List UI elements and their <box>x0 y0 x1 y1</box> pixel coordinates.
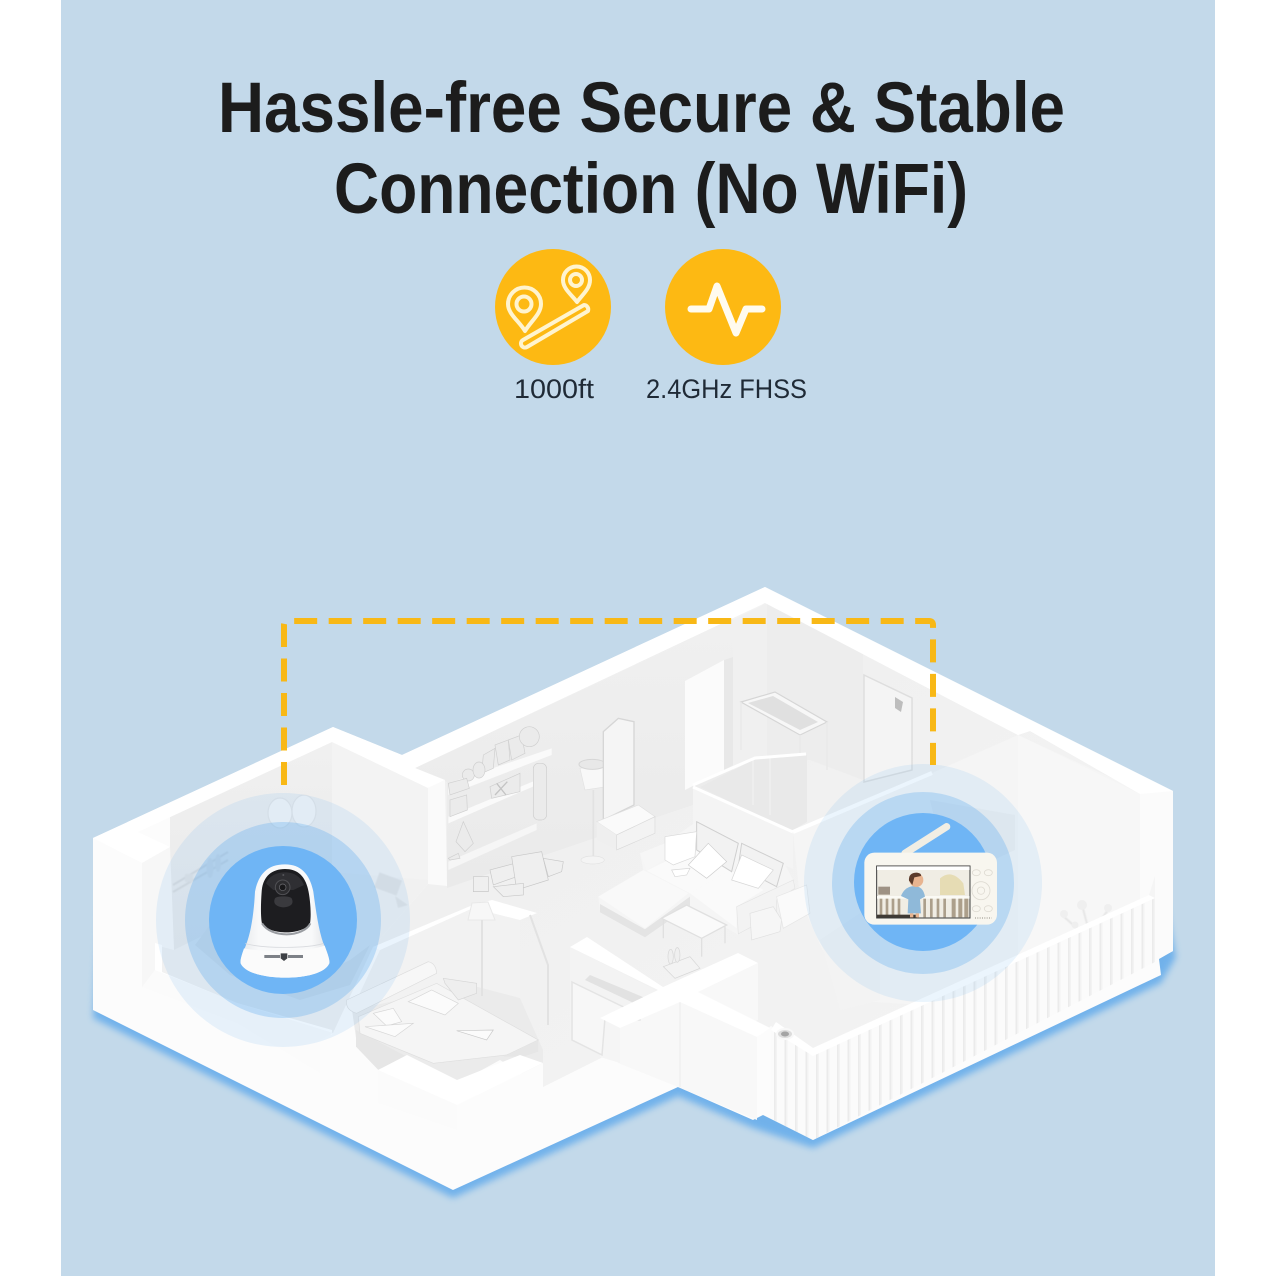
label: 2.4GHz FHSS: 2.4GHz FHSS <box>646 374 807 404</box>
wall faces <box>570 947 655 1053</box>
monitor control buttons <box>972 870 992 912</box>
camera lens face <box>261 869 311 932</box>
sofa <box>598 822 795 937</box>
feature: 1000ft range <box>495 249 611 404</box>
furniture: living room shelves, lamp, mirror, sofa <box>448 718 810 978</box>
wall tops <box>93 587 1173 863</box>
wall end pillar <box>428 780 447 886</box>
shower door <box>864 675 912 782</box>
sofa in left room <box>195 925 370 1000</box>
bookshelves <box>448 727 552 870</box>
right room bed and furniture <box>930 800 1015 880</box>
wall clocks <box>268 795 316 828</box>
floor vase cluster <box>663 948 700 978</box>
monitor antenna <box>905 827 947 853</box>
icon: map pins and distance <box>495 249 611 365</box>
standing mirror <box>603 718 634 820</box>
console table <box>597 805 655 850</box>
closet low wall <box>700 755 807 832</box>
closet back walls <box>767 603 863 780</box>
signal rings: camera <box>156 793 410 1047</box>
shelf and decor in left room <box>173 852 408 908</box>
front block faces <box>378 1070 457 1130</box>
house shadow <box>93 900 1176 1198</box>
title: Hassle-free Secure & Stable <box>218 69 1065 148</box>
living room back wall <box>415 620 733 888</box>
door <box>685 660 724 790</box>
bedroom floor <box>352 985 543 1087</box>
monitor body <box>864 853 997 925</box>
balcony railing <box>770 876 1155 1140</box>
door frame and lamp in bedroom <box>530 915 548 1025</box>
feature: 2.4GHz FHSS <box>646 249 807 404</box>
parent monitor device <box>864 827 997 925</box>
floor drain <box>777 1029 793 1039</box>
signal rings: monitor <box>804 764 1042 1002</box>
floor plan illustration <box>93 587 1176 1198</box>
icon: signal pulse <box>665 249 781 365</box>
wall top cross <box>570 937 770 1037</box>
stack of books <box>473 852 563 897</box>
floor lamp <box>579 759 607 864</box>
front block top <box>378 1055 543 1105</box>
closet shelving <box>741 692 827 735</box>
main interior <box>373 603 1173 1087</box>
label: 1000ft: 1000ft <box>514 374 595 404</box>
bedroom wall top <box>373 900 537 950</box>
baby on screen <box>901 873 925 917</box>
camera logo mark <box>264 953 303 961</box>
left room interior <box>142 742 428 1073</box>
coffee table <box>662 905 727 957</box>
low window sill <box>142 970 333 1073</box>
camera device <box>241 864 329 978</box>
side table with books <box>750 907 782 940</box>
corner pillar <box>733 603 767 760</box>
house silhouette <box>93 587 1173 1190</box>
balcony plant <box>1062 905 1108 980</box>
bedroom back wall <box>352 908 520 1010</box>
title: Connection (No WiFi) <box>334 150 968 229</box>
dashed connection line <box>284 621 933 785</box>
bed <box>346 962 538 1070</box>
title <box>218 69 1065 229</box>
cross shaped walls and front blocks <box>346 900 770 1130</box>
right room wall <box>793 735 1140 1010</box>
dresser <box>572 982 640 1055</box>
monitor screen <box>877 866 970 918</box>
